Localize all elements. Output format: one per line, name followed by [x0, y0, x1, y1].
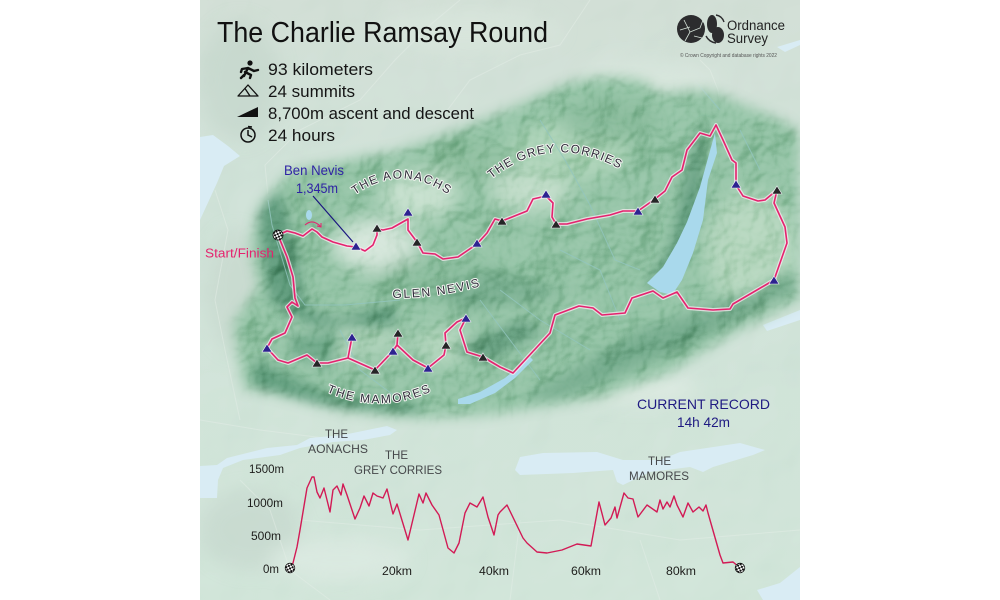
lochs in the surrounding landscape [200, 40, 800, 600]
profile label: The Aonachs: AONACHS [308, 442, 368, 456]
map background [200, 0, 800, 600]
elevation axis labels: 500m [251, 531, 281, 543]
distance axis labels: 80km [666, 566, 696, 578]
icon: summits [238, 85, 258, 96]
elevation axis labels [247, 464, 284, 576]
marker: profile start [285, 563, 295, 573]
elevation axis labels: 0m [263, 564, 279, 576]
stat: distance: 93 kilometers [268, 60, 373, 79]
logo mark [677, 15, 724, 43]
distance axis labels: 20km [382, 566, 412, 578]
icon: stopwatch [241, 126, 255, 142]
route line on the map [267, 125, 787, 373]
leader line [313, 196, 353, 242]
copyright: © Crown Copyright and database rights 2022 [680, 52, 777, 59]
label: Glen Nevis: GLEN NEVIS [392, 278, 480, 299]
small lochan under Ben Nevis [306, 210, 312, 220]
range labels on the map [328, 143, 623, 404]
distance axis labels [382, 566, 696, 578]
distance axis labels: 60km [571, 566, 601, 578]
profile label: The Mamores: THE [648, 454, 671, 468]
profile label: The Aonachs: THE [325, 427, 348, 441]
marker: start/finish checker on map [273, 230, 283, 240]
loch: Treig [647, 133, 717, 295]
Ben Nevis height: 1,345m [296, 181, 338, 196]
Ben Nevis name: Ben Nevis [284, 163, 344, 178]
callout: current record [637, 396, 770, 430]
label: The Grey Corries: THE GREY CORRIES [486, 143, 623, 178]
callout: Ben Nevis [284, 163, 353, 242]
stat: summits: 24 summits [268, 82, 355, 101]
elevation profile [247, 427, 745, 578]
distance axis labels: 40km [479, 566, 509, 578]
label: The Mamores: THE MAMORES [328, 383, 430, 404]
record heading: CURRENT RECORD [637, 396, 770, 412]
stat: ascent: 8,700m ascent and descent [268, 104, 474, 123]
marker: profile finish [735, 563, 745, 573]
Ordnance Survey logo [677, 15, 785, 59]
summit markers: black [312, 186, 782, 374]
terrain: green mountain relief [200, 60, 800, 430]
stat: time: 24 hours [268, 126, 335, 145]
icon: runner [241, 60, 258, 78]
summit markers: blue [262, 180, 779, 372]
record time: 14h 42m [677, 414, 730, 430]
route direction arrow [305, 222, 321, 227]
elevation axis labels: 1500m [249, 464, 284, 476]
label: The Aonachs: THE AONACHS [350, 169, 452, 194]
elevation line [292, 477, 739, 567]
profile label: The Grey Corries [354, 448, 442, 477]
icon: ascent wedge [237, 107, 258, 117]
label: Start/Finish: Start/Finish [205, 246, 274, 260]
profile label: The Grey Corries: GREY CORRIES [354, 463, 442, 477]
logo wordmark: Ordnance [727, 18, 785, 33]
Ordnance Survey logo: Survey [727, 31, 768, 46]
profile label: The Mamores [629, 454, 689, 483]
profile label: The Aonachs [308, 427, 368, 456]
loch: Blackwater [458, 357, 533, 404]
title: The Charlie Ramsay Round [217, 17, 548, 49]
stats list [237, 60, 474, 145]
profile label: The Mamores: MAMORES [629, 469, 689, 483]
elevation axis labels: 1000m [247, 498, 283, 510]
profile label: The Grey Corries: THE [385, 448, 408, 462]
